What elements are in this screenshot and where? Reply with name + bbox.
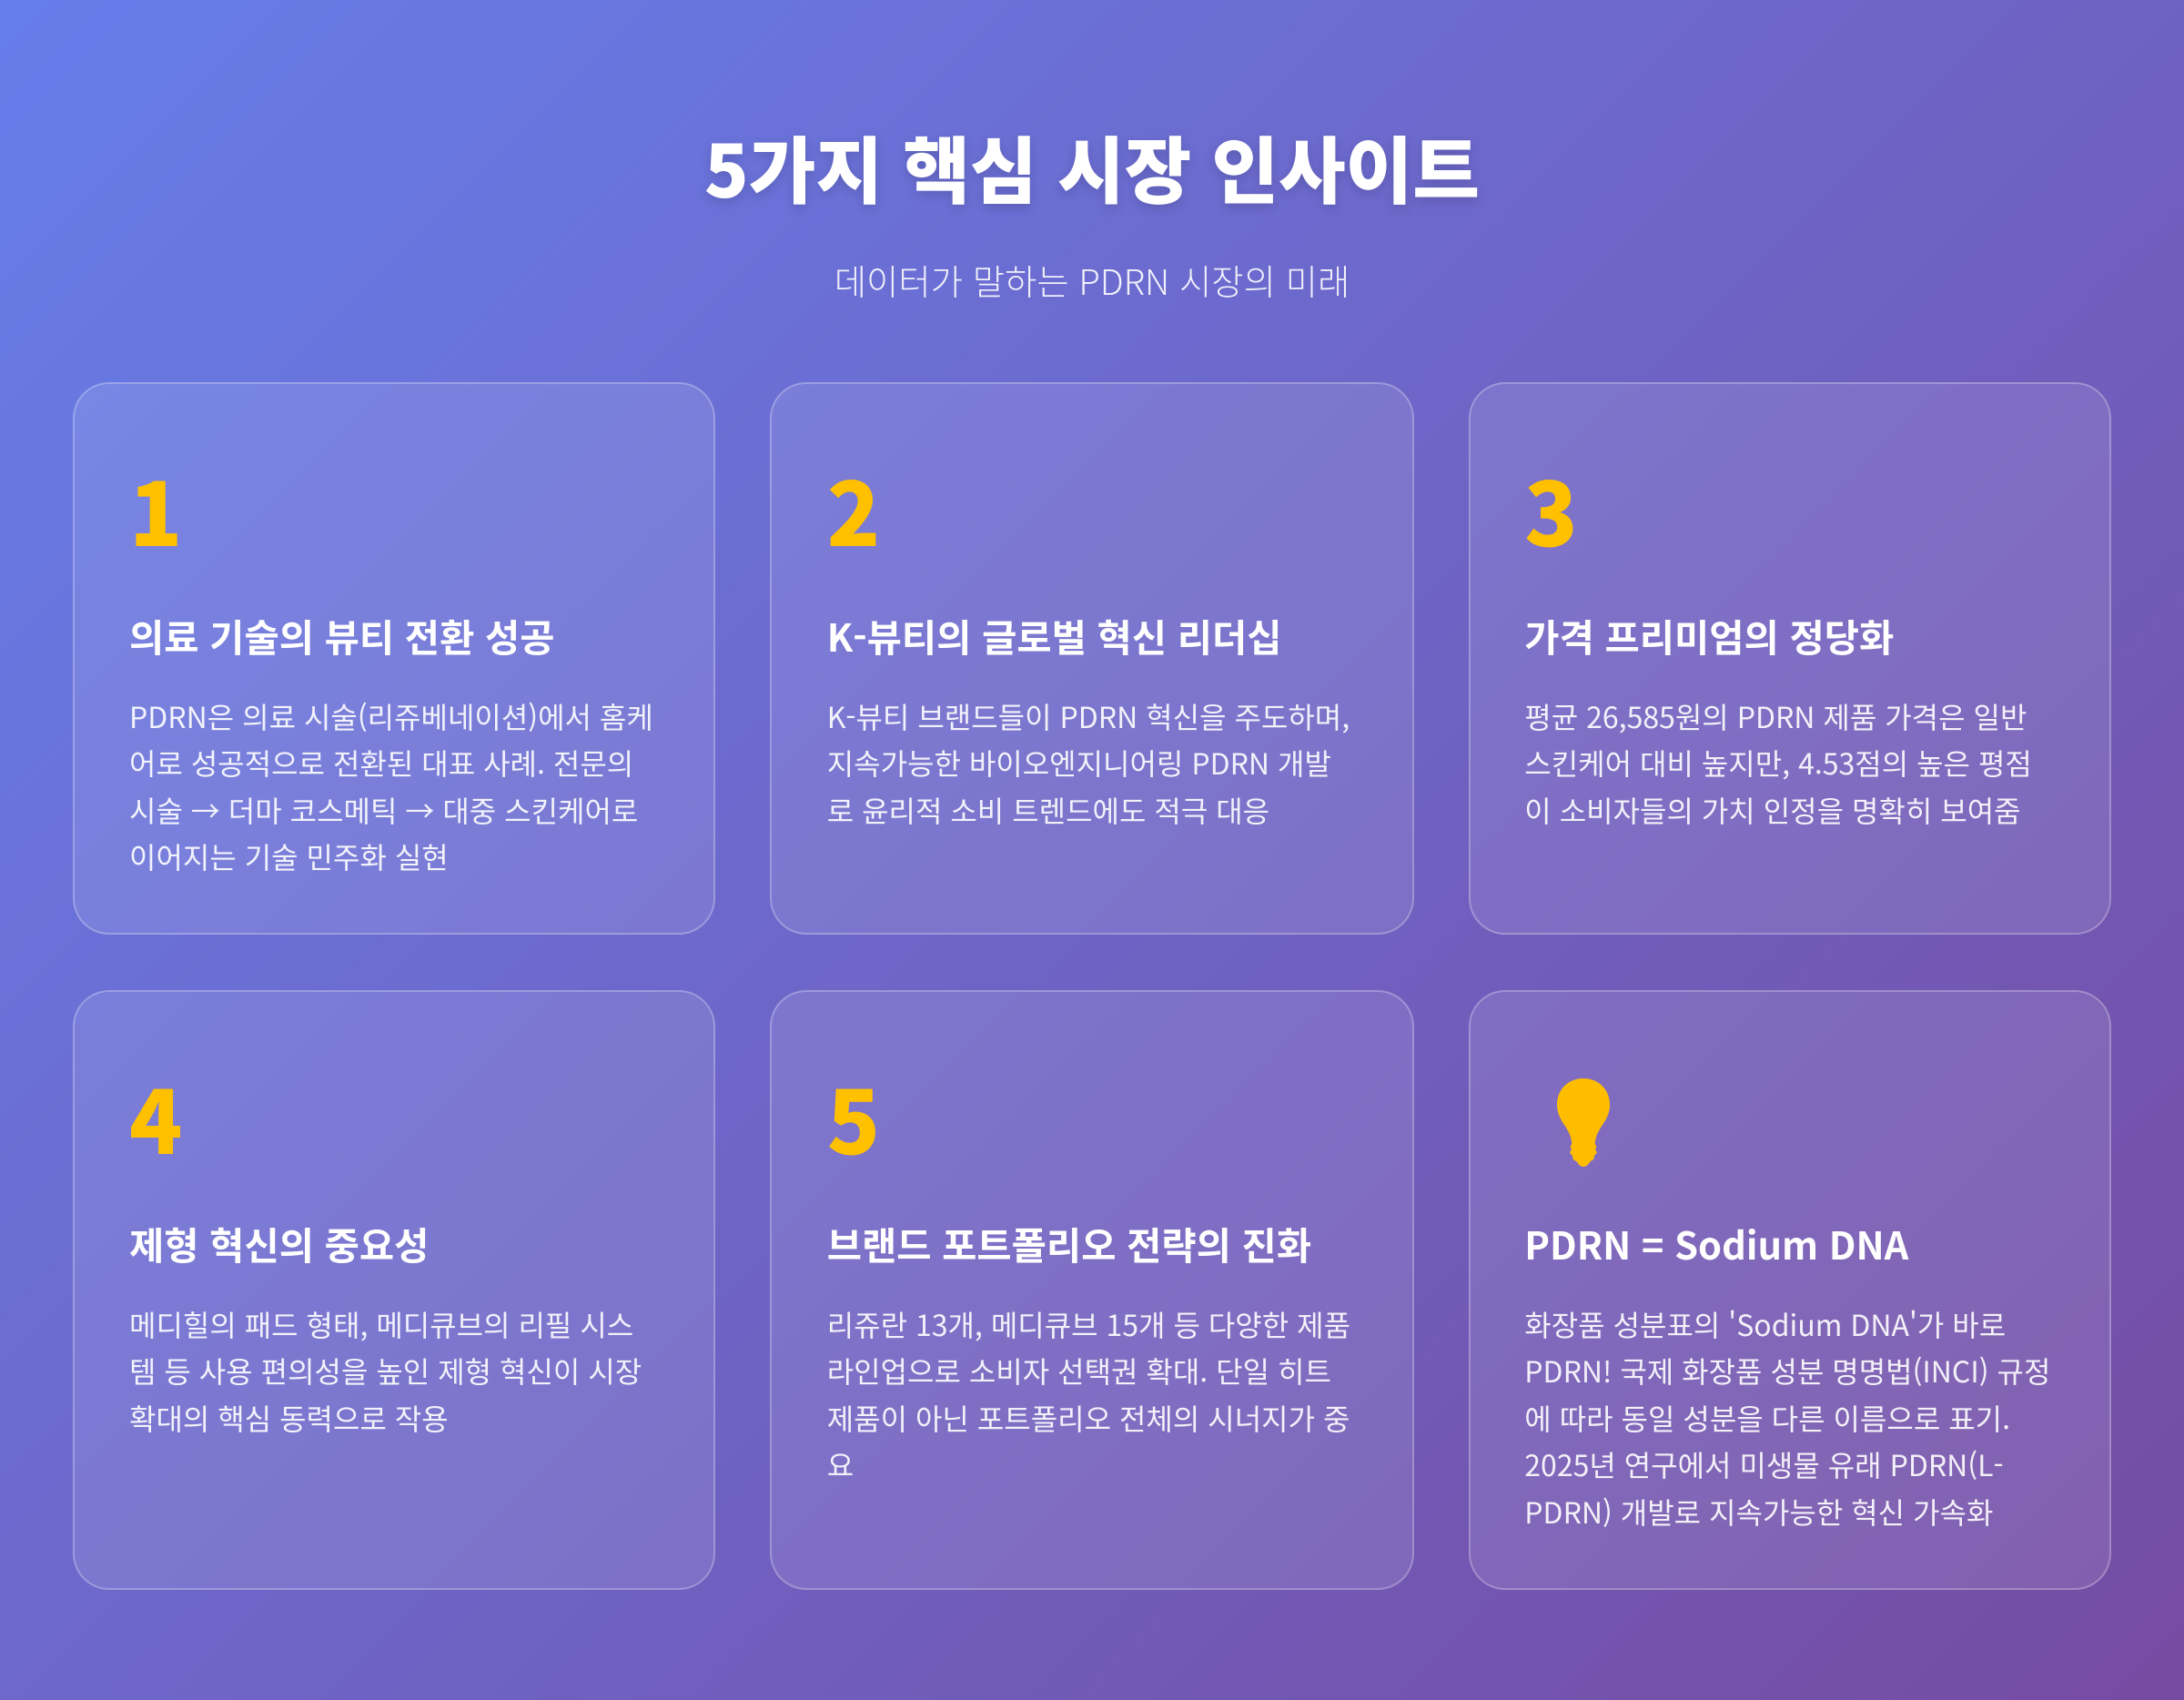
number 2: 2 [827,445,880,572]
panel: PDRN = Sodium DNA [1469,990,2111,1590]
number 3: 3 [1524,445,1578,572]
text 6: PDRN) 개발로 지속가능한 혁신 가속화 [1524,1491,1993,1533]
text 5: 제품이 아닌 포트폴리오 전체의 시너지가 중 [827,1397,1350,1439]
number 4: 4 [129,1053,182,1179]
heading 1: 의료 기술의 뷰티 전환 성공 [129,608,555,663]
text 3 [1524,695,2032,831]
text 5: 리쥬란 13개, 메디큐브 15개 등 다양한 제품 [827,1303,1350,1345]
text 1: 어로 성공적으로 전환된 대표 사례. 전문의 [129,742,633,784]
text 1: PDRN은 의료 시술(리쥬베네이션)에서 홈케 [129,695,653,737]
panel: insight 1 [73,382,715,935]
subtitle: 데이터가 말하는 PDRN 시장의 미래 [834,255,1350,306]
heading 6: PDRN = Sodium DNA [1524,1216,1908,1270]
number 1: 1 [129,445,182,572]
text 6: 2025년 연구에서 미생물 유래 PDRN(L- [1524,1443,2004,1485]
text 4: 확대의 핵심 동력으로 작용 [129,1397,449,1439]
text 1 [129,695,653,877]
title: 5가지 핵심 시장 인사이트 [704,114,1480,219]
heading 3: 가격 프리미엄의 정당화 [1524,608,1894,663]
text 4: 템 등 사용 편의성을 높인 제형 혁신이 시장 [129,1350,642,1391]
heading 4: 제형 혁신의 중요성 [129,1216,429,1270]
text 6: 화장품 성분표의 'Sodium DNA'가 바로 [1524,1303,2006,1345]
number 5: 5 [827,1053,880,1179]
panel: insight 4 [73,990,715,1590]
text 3: 스킨케어 대비 높지만, 4.53점의 높은 평점 [1524,742,2032,784]
panel: insight 3 [1469,382,2111,935]
text 6: PDRN! 국제 화장품 성분 명명법(INCI) 규정 [1524,1350,2050,1391]
icon: light bulb [1556,1078,1610,1167]
text 2: 지속가능한 바이오엔지니어링 PDRN 개발 [827,742,1331,784]
text 2 [827,695,1350,831]
text 2: 로 윤리적 소비 트렌드에도 적극 대응 [827,789,1269,831]
text 1: 시술 → 더마 코스메틱 → 대중 스킨케어로 [129,789,638,831]
text 2: K-뷰티 브랜드들이 PDRN 혁신을 주도하며, [827,695,1350,737]
text 3: 평균 26,585원의 PDRN 제품 가격은 일반 [1524,695,2027,737]
text 5 [827,1303,1350,1485]
panel: insight 2 [770,382,1414,935]
text 5: 라인업으로 소비자 선택권 확대. 단일 히트 [827,1350,1331,1391]
text 4: 메디힐의 패드 형태, 메디큐브의 리필 시스 [129,1303,633,1345]
text 1: 이어지는 기술 민주화 실현 [129,835,449,877]
panel: insight 5 [770,990,1414,1590]
text 4 [129,1303,642,1439]
heading 2: K-뷰티의 글로벌 혁신 리더십 [827,608,1282,663]
text 3: 이 소비자들의 가치 인정을 명확히 보여줌 [1524,789,2021,831]
text 6: 에 따라 동일 성분을 다른 이름으로 표기. [1524,1397,2010,1439]
heading 5: 브랜드 포트폴리오 전략의 진화 [827,1216,1311,1270]
text 6 [1524,1303,2050,1533]
text 5: 요 [827,1443,854,1485]
